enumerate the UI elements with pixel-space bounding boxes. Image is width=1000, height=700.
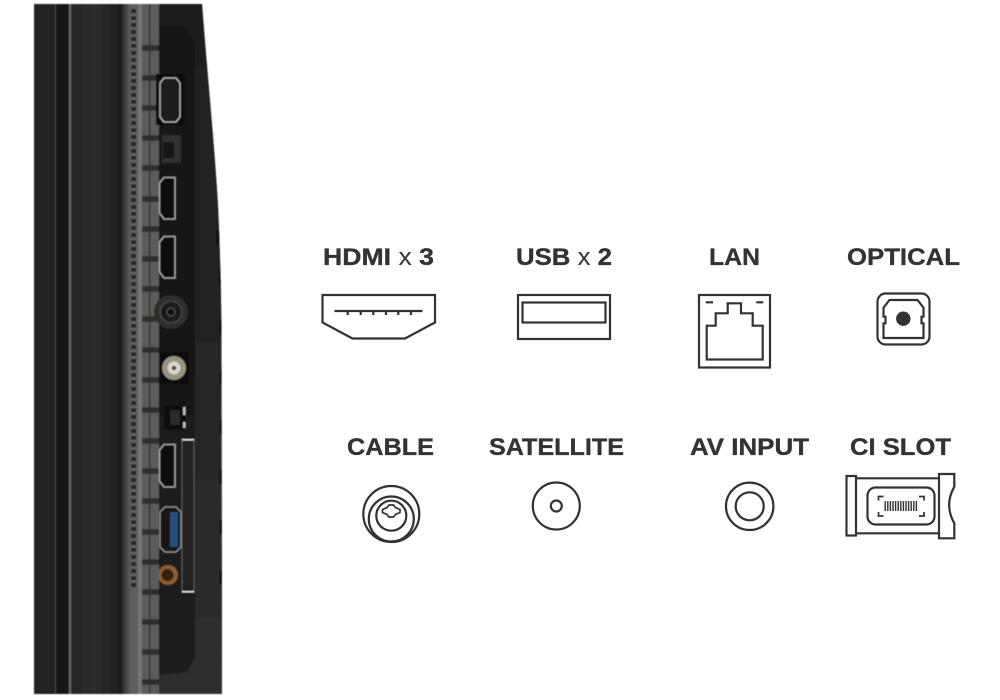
icon: HDMI (322, 295, 435, 338)
port: USB blue (160, 507, 181, 552)
icon: LAN (699, 295, 770, 368)
port: AV jack (158, 565, 178, 585)
icon: cable (363, 486, 419, 542)
TV side panel photo (34, 4, 224, 694)
label: HDMI x 3: HDMI x 3 (323, 244, 434, 271)
port: HDMI upper (160, 178, 175, 219)
icon: satellite (533, 482, 580, 530)
icon: USB (518, 295, 610, 339)
label: SATELLITE: SATELLITE (489, 434, 624, 461)
port: HDMI top (156, 74, 185, 125)
icon: AV input (726, 483, 773, 530)
port: satellite socket (159, 352, 189, 384)
port: optical (164, 405, 186, 430)
label: AV INPUT: AV INPUT (690, 434, 809, 461)
port: HDMI lower (160, 444, 175, 487)
icon: optical (878, 294, 930, 344)
port: cable socket (154, 295, 188, 329)
icon: CI slot (846, 474, 954, 538)
label: CI SLOT: CI SLOT (850, 434, 951, 461)
label: OPTICAL: OPTICAL (847, 244, 960, 271)
port: HDMI middle (160, 236, 175, 278)
label: USB x 2: USB x 2 (516, 244, 612, 271)
label: LAN: LAN (709, 244, 760, 271)
port: optical dark (162, 135, 181, 163)
label: CABLE: CABLE (347, 434, 434, 461)
CI card slot (182, 439, 194, 592)
